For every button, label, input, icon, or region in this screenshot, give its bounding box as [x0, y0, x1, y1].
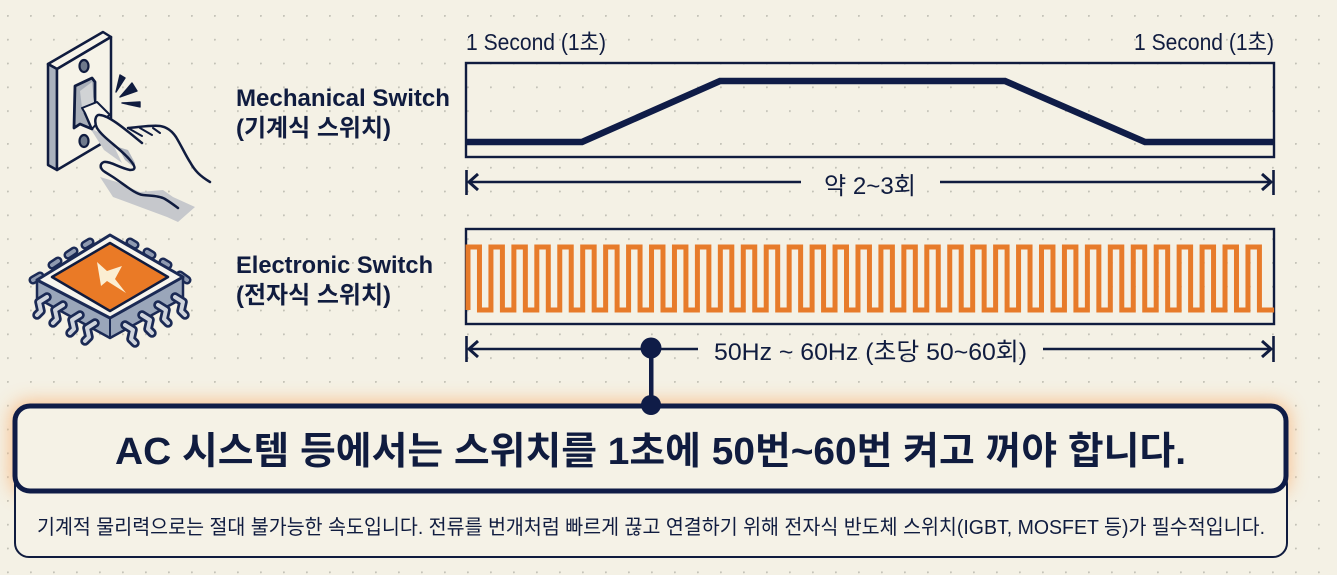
panel: explanation: 기계적 물리력으로는 절대 불가능한 속도입니다. 전류를 번개처럼 빠르게 끊고 연결하기 위해 전자식 반도체 스위치(IGBT, MOSFET 등)가 필수적입니다. — [37, 516, 1265, 539]
panel: main callout — [15, 406, 1286, 491]
label: 1 second left: 1 Second (1초) — [466, 29, 606, 55]
arrow: electronic duration — [466, 336, 1274, 362]
label: 50 to 60 Hz: 50Hz ~ 60Hz (초당 50~60회) — [714, 338, 1027, 366]
label: mechanical switch: Mechanical Switch — [236, 85, 450, 112]
chart: mechanical switch waveform — [466, 63, 1274, 157]
connector: chart to callout — [640, 338, 662, 415]
icon: wall switch with pressing hand — [48, 32, 210, 222]
panel: explanation — [15, 470, 1287, 557]
chart: electronic switch square wave — [466, 229, 1274, 324]
callout glow — [10, 401, 1290, 496]
label: mechanical switch: (기계식 스위치) — [236, 115, 391, 142]
label: about 2 to 3 times: 약 2~3회 — [824, 173, 916, 200]
icon: microchip with lightning bolt — [33, 235, 187, 343]
label: 1 second right: 1 Second (1초) — [1134, 29, 1274, 55]
panel: main callout: AC 시스템 등에서는 스위치를 1초에 50번~60번 켜고 꺼야 합니다. — [115, 431, 1186, 473]
label: mechanical switch — [236, 85, 450, 142]
icon: lightning bolt — [97, 262, 126, 293]
label: electronic switch — [236, 252, 433, 309]
label: electronic switch: Electronic Switch — [236, 252, 433, 279]
label: electronic switch: (전자식 스위치) — [236, 282, 391, 309]
arrow: mechanical duration — [466, 170, 1274, 195]
